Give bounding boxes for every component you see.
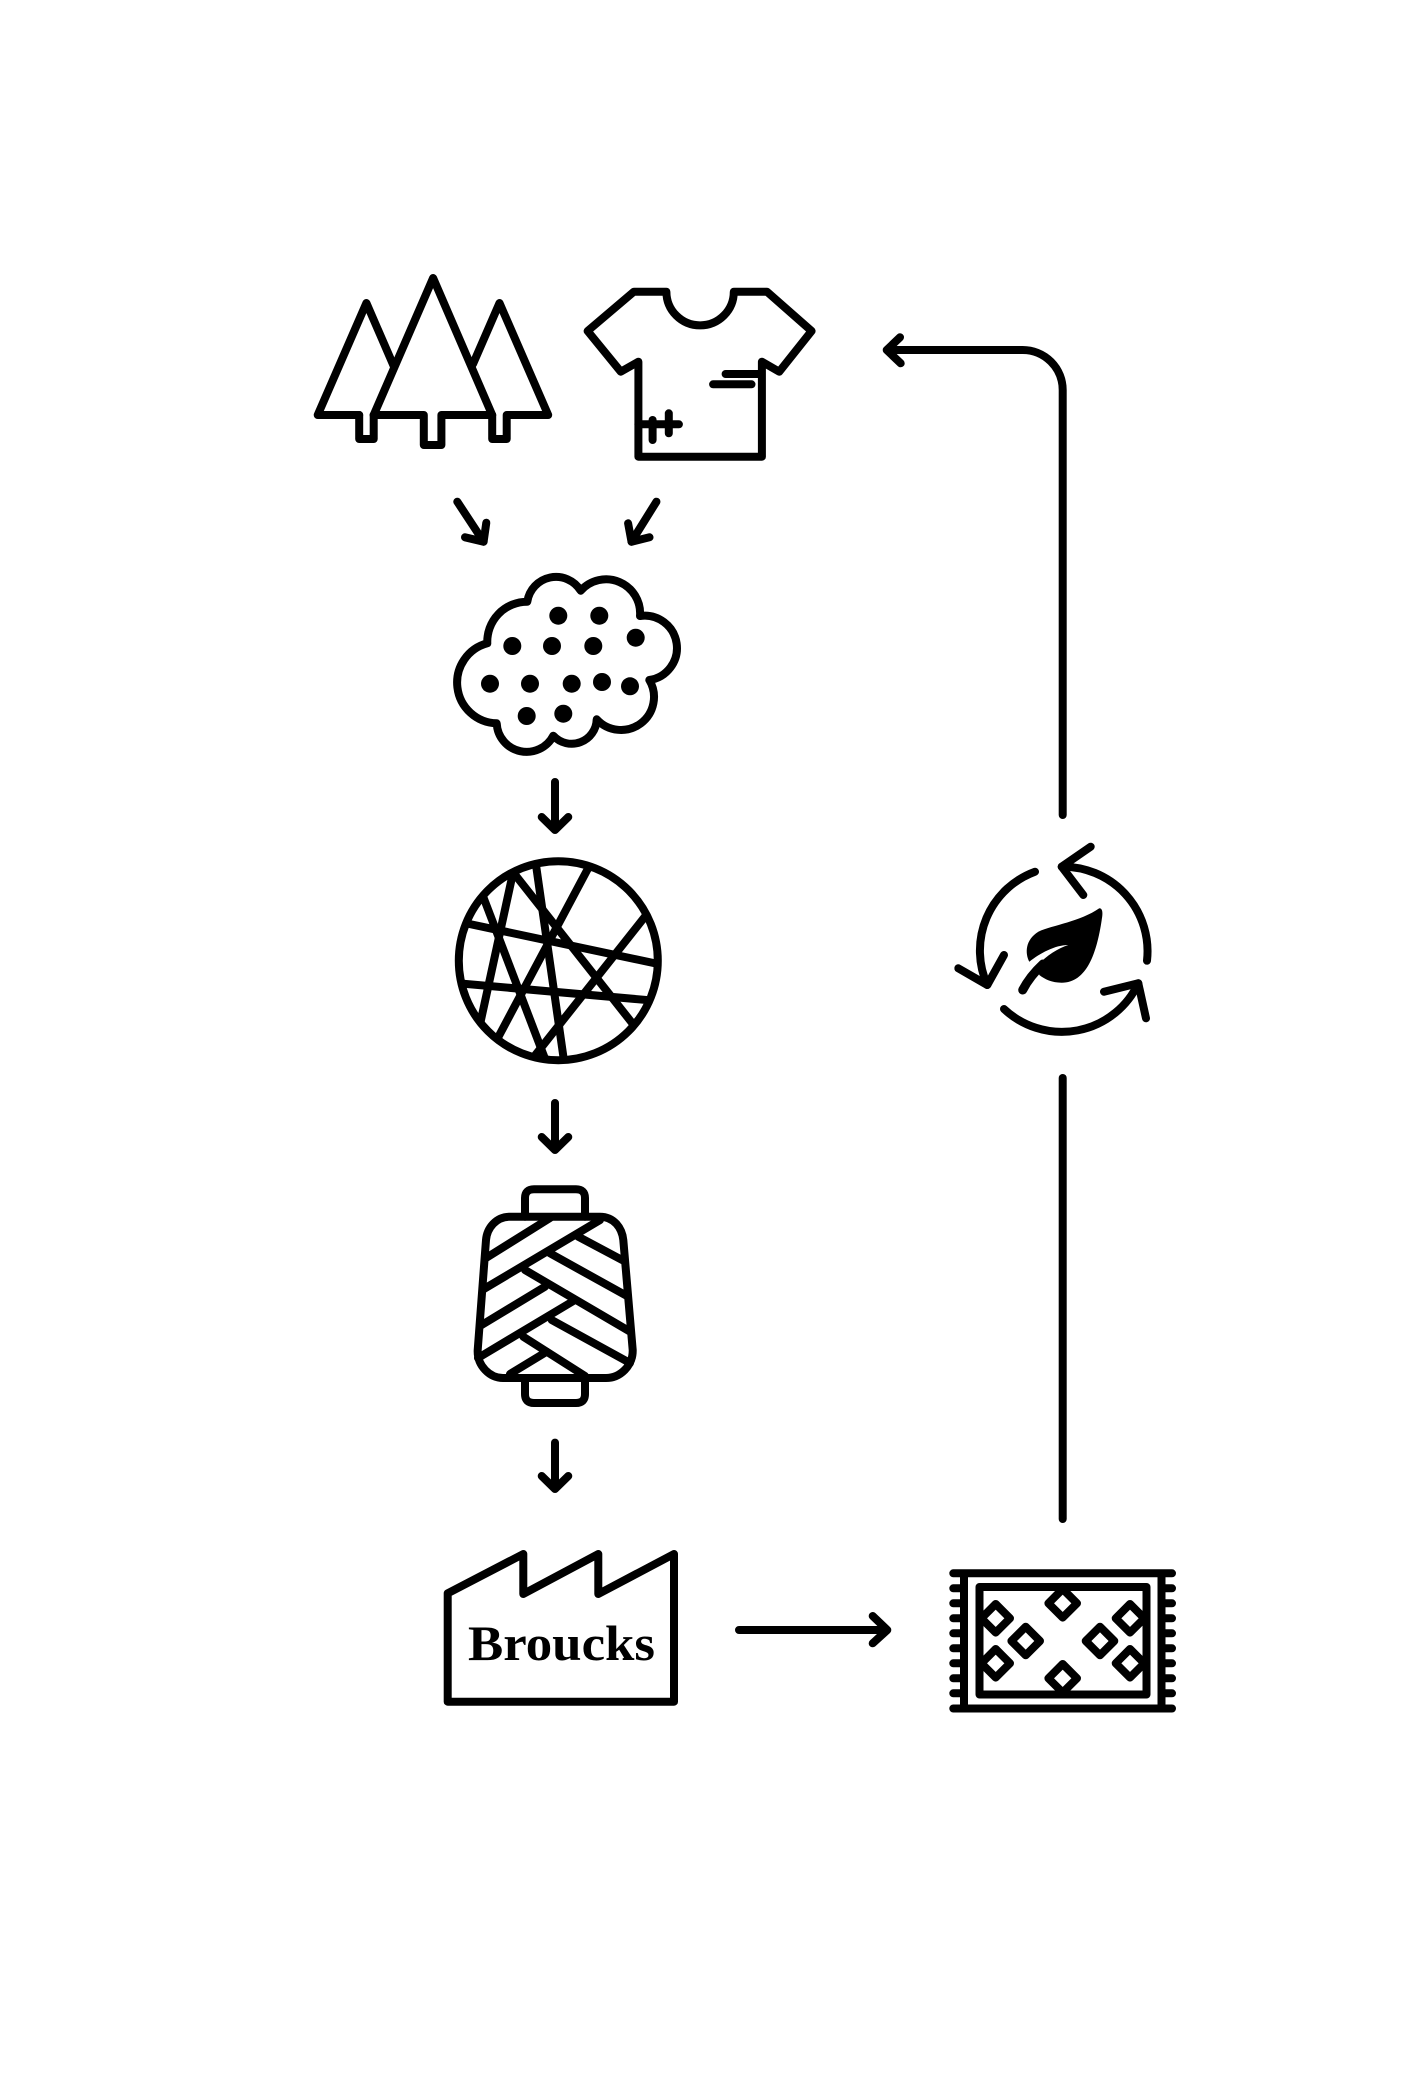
leaf stem: [1023, 964, 1043, 990]
arrow: factory to rug: [739, 1616, 887, 1643]
factory label: Broucks: [468, 1615, 655, 1671]
arrow: trees to fibre: [457, 502, 486, 542]
icon: fibre cloud: [457, 577, 677, 752]
icon: Broucks factory: [448, 1554, 674, 1702]
arrow: recycling back to t-shirt: [887, 337, 1063, 815]
circular process diagram: [314, 274, 1176, 1712]
arrow: yarn ball to spool: [542, 1103, 568, 1150]
leaf: [1027, 908, 1102, 983]
icon: worn t-shirt: [588, 292, 812, 457]
arrow: spool to factory: [542, 1443, 568, 1489]
arrow: fibre to yarn ball: [542, 782, 568, 830]
icon: recycling with leaf: [958, 847, 1148, 1032]
icon: three trees: [318, 278, 548, 445]
fibre dots: [481, 607, 645, 725]
icon: yarn spool: [478, 1189, 633, 1403]
arrow: shirt to fibre: [628, 502, 656, 542]
arrow: rug to recycling: [1059, 1078, 1067, 1519]
icon: woven rug: [953, 1573, 1172, 1708]
icon: yarn ball: [455, 858, 663, 1068]
